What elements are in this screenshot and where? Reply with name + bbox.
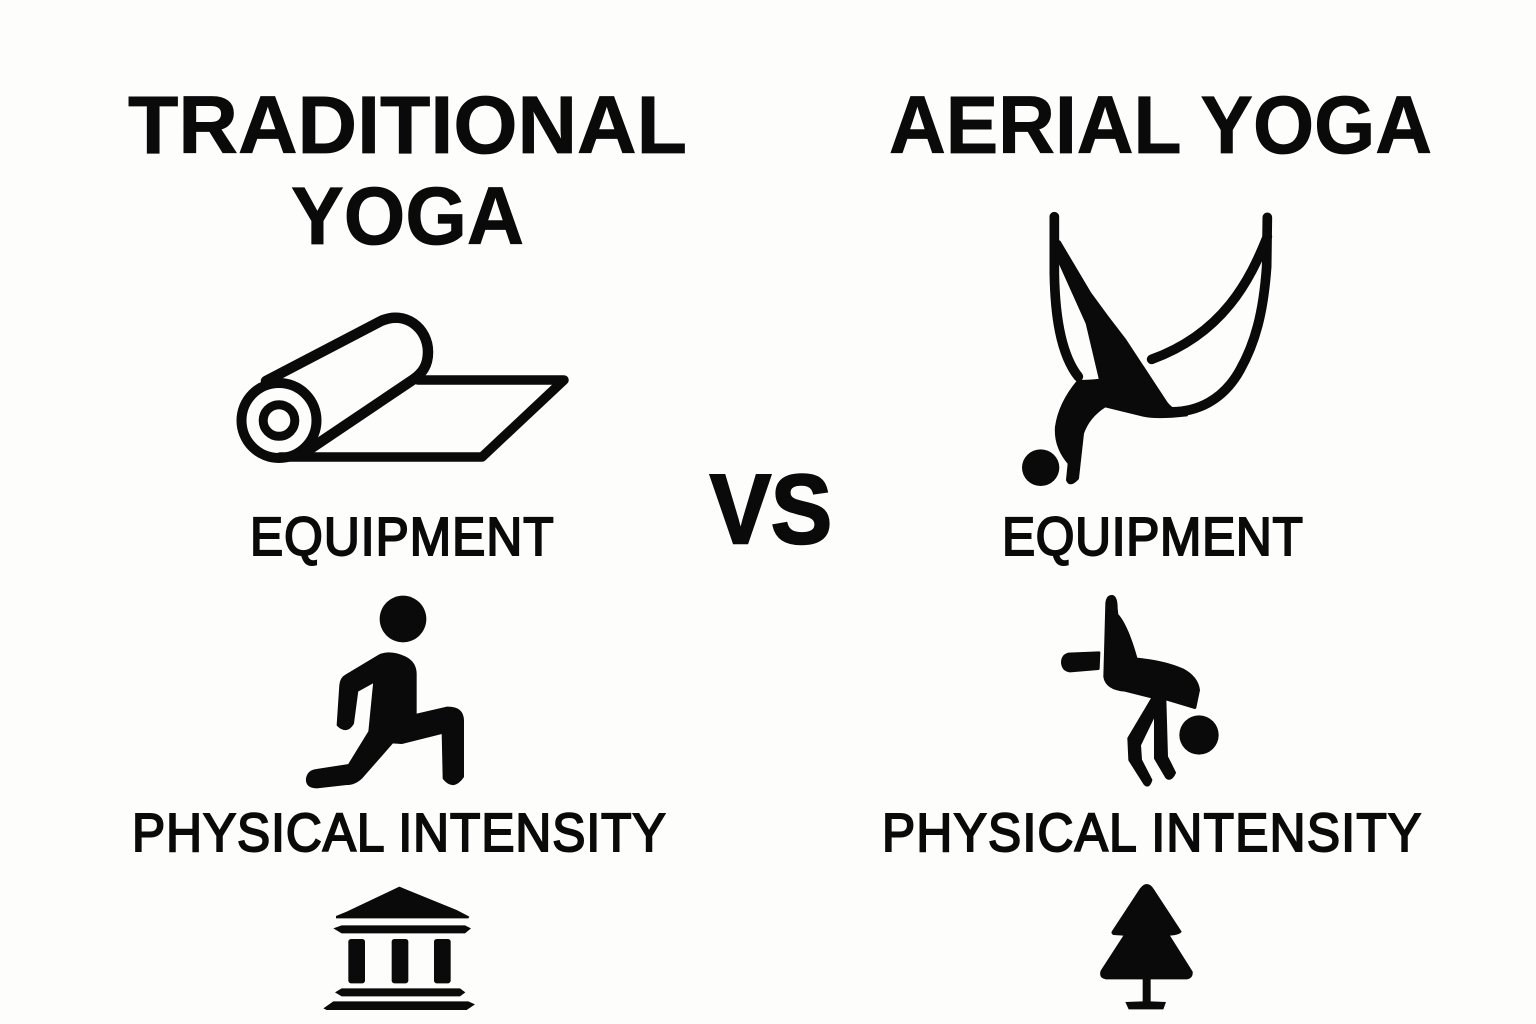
label: equipment: EQUIPMENT [250,506,554,566]
icon: pine tree [1100,884,1193,1009]
icon: aerial hammock pose [1022,217,1267,486]
heading: traditional yoga: TRADITIONAL [128,80,687,171]
heading: aerial yoga: AERIAL YOGA [889,80,1432,171]
label: equipment: EQUIPMENT [1002,506,1303,566]
heading: traditional yoga: YOGA [291,171,524,262]
label: physical intensity: PHYSICAL INTENSITY [132,802,666,862]
icon: lunge figure [307,596,463,787]
vs label: VS [710,454,832,564]
icon: rolled yoga mat [242,318,564,458]
icon: classical temple [323,887,475,1010]
icon: inverted pose figure [1062,596,1219,785]
heading: traditional yoga [128,80,687,262]
label: physical intensity: PHYSICAL INTENSITY [882,802,1421,862]
panel: aerial yoga [882,80,1432,1009]
panel: traditional yoga [128,80,687,1010]
